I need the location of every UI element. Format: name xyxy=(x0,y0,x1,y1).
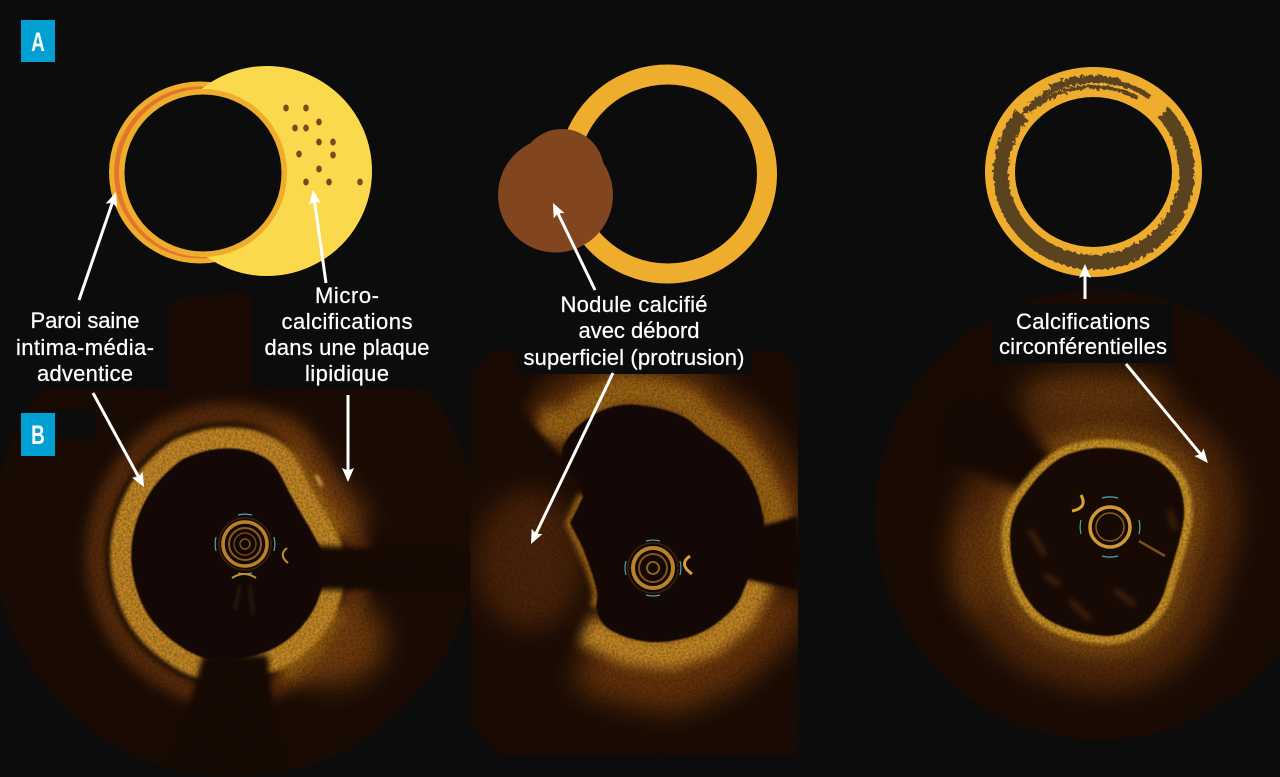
lumen xyxy=(124,94,282,252)
label: microcalcifications xyxy=(264,283,430,386)
label: calcified nodule xyxy=(524,292,744,370)
label: calcified nodule: avec débord xyxy=(578,318,700,343)
label: circumferential calcifications: circonférentielles xyxy=(999,334,1167,359)
arrow: circumferential OCT xyxy=(1126,364,1206,461)
microcalcification dots xyxy=(283,104,363,186)
badge A xyxy=(21,20,55,62)
lumen xyxy=(131,448,324,660)
arrow: nodule diagram xyxy=(554,206,595,290)
label: healthy wall xyxy=(16,308,154,386)
arrow: nodule OCT xyxy=(532,373,613,541)
arrow: microcalcification OCT xyxy=(346,395,350,479)
badge A: A xyxy=(31,27,45,57)
arrow: circumferential diagram xyxy=(1084,267,1086,299)
label: healthy wall: adventice xyxy=(37,361,133,386)
label: calcified nodule: Nodule calcifié xyxy=(560,292,708,317)
catheter xyxy=(1072,495,1165,557)
diagram: calcified nodule xyxy=(498,74,767,274)
diagram: circumferential calcifications xyxy=(985,67,1202,277)
badge B xyxy=(21,413,55,456)
lumen xyxy=(1010,448,1184,636)
OCT image: calcified nodule xyxy=(470,350,798,755)
diagram: healthy wall and lipid plaque xyxy=(109,66,372,276)
label: microcalcifications: dans une plaque xyxy=(264,335,430,360)
label: circumferential calcifications xyxy=(999,309,1167,359)
label: microcalcifications: Micro- xyxy=(315,283,379,308)
intraluminal specks xyxy=(1030,510,1175,620)
label: microcalcifications: calcifications xyxy=(282,309,412,334)
arrow: microcalcification diagram xyxy=(313,193,326,283)
arrow: wall OCT xyxy=(93,393,143,484)
label: calcified nodule: superficiel (protrusion) xyxy=(524,345,744,370)
label mask boxes xyxy=(0,290,1173,439)
badge B: B xyxy=(31,420,45,450)
bright microcalcification specks xyxy=(316,475,322,486)
catheter xyxy=(215,514,288,615)
label: microcalcifications: lipidique xyxy=(305,361,389,386)
label: healthy wall: Paroi saine xyxy=(30,308,140,333)
arrows xyxy=(79,193,1206,541)
OCT image: healthy wall and lipid plaque xyxy=(0,290,480,777)
arrow: wall diagram xyxy=(79,195,115,300)
lumen xyxy=(560,405,764,642)
catheter xyxy=(625,540,692,596)
label: circumferential calcifications: Calcifications xyxy=(1016,309,1150,334)
label: healthy wall: intima-média- xyxy=(16,335,154,360)
OCT image: circumferential calcifications xyxy=(870,290,1280,740)
